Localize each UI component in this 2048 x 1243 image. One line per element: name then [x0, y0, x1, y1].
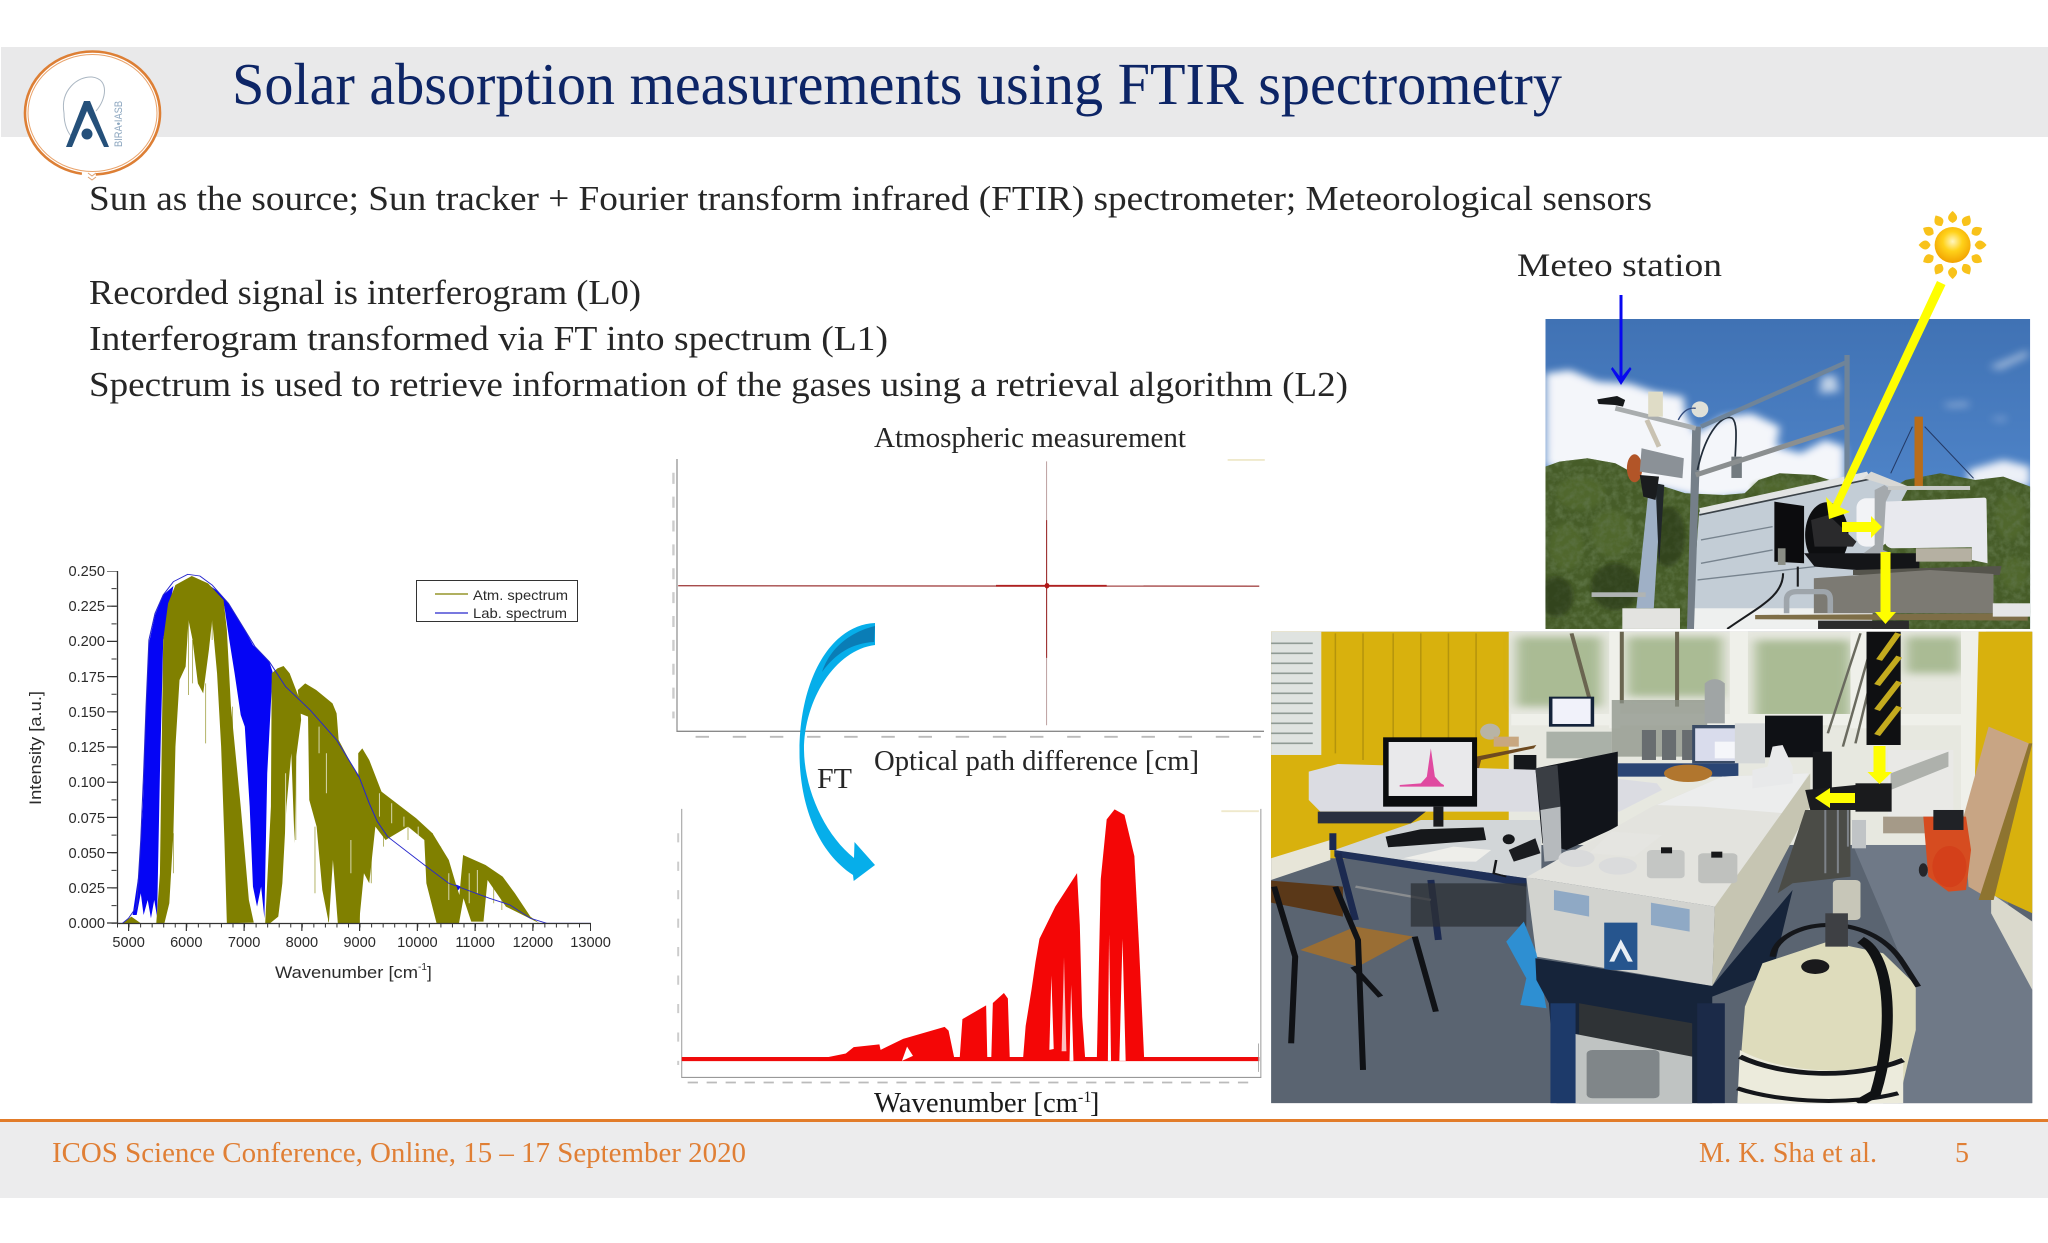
x axis tick labels: 13000: [570, 935, 611, 951]
cable cluster: [1778, 810, 1850, 893]
logo: BIRA-IASB: [24, 51, 160, 180]
legend: Lab. spectrum: [473, 605, 567, 621]
building: [1690, 475, 1909, 629]
spectral lines: [173, 620, 502, 922]
main spectrometer: [1527, 776, 1759, 906]
intro text block: [89, 179, 1652, 404]
left instrument: [1309, 764, 1662, 812]
header band: [1, 47, 2048, 137]
arrow: Fourier transform: [799, 623, 875, 881]
x axis tick labels: [112, 935, 611, 951]
x axis tick labels: 9000: [343, 935, 376, 951]
y axis tick labels: 0.025: [68, 881, 105, 897]
x axis title: -1: [418, 962, 427, 973]
y axis tick labels: 0.075: [68, 811, 105, 827]
chart label: optical path difference: Optical path difference [cm]: [874, 746, 1199, 777]
monitor: [1383, 737, 1477, 807]
black and yellow pole: [1867, 632, 1901, 745]
arrow: lab beam left: [1815, 788, 1855, 808]
x axis tick labels: 6000: [170, 935, 203, 951]
footer: author: M. K. Sha et al.: [1699, 1138, 1877, 1169]
y axis tick labels: 0.050: [68, 846, 105, 862]
chart label: wavenumber: Wavenumber [cm: [874, 1088, 1078, 1119]
tracker: [1774, 502, 1804, 563]
footer: page number: 5: [1955, 1138, 1969, 1169]
background desk items: [1549, 697, 1594, 727]
y axis tick labels: 0.175: [68, 670, 105, 686]
lab spectrum line: [117, 574, 590, 923]
mast: [1915, 417, 1923, 487]
intro text block: Sun as the source; Sun tracker + Fourier transform infrared (FTIR) spectrometer; Meteorological sensors: [89, 179, 1652, 218]
chart label: wavenumber: ]: [1090, 1088, 1099, 1119]
chart: solar spectrum in wavenumber: [678, 809, 1261, 1082]
y axis tick labels: [68, 564, 105, 932]
x axis tick labels: 12000: [513, 935, 553, 951]
blue lab spectrum absorption areas: [133, 583, 461, 918]
yellow wall: [1271, 632, 1512, 858]
y axis tick labels: 0.000: [68, 916, 105, 932]
x axis title: ]: [427, 963, 432, 982]
back windows: [1509, 632, 1986, 845]
y axis tick labels: 0.225: [68, 599, 105, 615]
desk: [1333, 820, 1541, 878]
lower bench: [1535, 890, 1793, 1103]
legend: Atm. spectrum: [473, 587, 568, 603]
arrow: blue pointer to meteo station: [1611, 295, 1632, 385]
y axis tick labels: 0.125: [68, 740, 105, 756]
intro text block: Recorded signal is interferogram (L0): [89, 273, 641, 312]
blue bag: [1506, 922, 1546, 1008]
white sampler: [1752, 745, 1792, 776]
footer band: [0, 1119, 2048, 1198]
legend: [416, 580, 578, 622]
chart: interferogram: [673, 459, 1265, 737]
axes and ticks: [112, 571, 591, 927]
intro text block: Spectrum is used to retrieve information of the gases using a retrieval algorithm (L2): [89, 365, 1348, 404]
y axis tick labels: 0.100: [68, 775, 105, 791]
label: FT: FT: [817, 764, 852, 795]
y axis tick labels: 0.150: [68, 705, 105, 721]
title: Solar absorption measurements using FTIR spectrometry: [232, 51, 1562, 117]
wood boards: [1964, 727, 2029, 900]
label: meteo station: Meteo station: [1517, 248, 1722, 284]
chart label: wavenumber: -1: [1078, 1089, 1091, 1106]
arrow: lab beam down: [1868, 746, 1892, 784]
x axis tick labels: 5000: [112, 935, 145, 951]
x axis tick labels: 8000: [286, 935, 318, 951]
logo: BIRA-IASB: BIRA•IASB: [113, 101, 125, 147]
olive atmospheric spectrum areas: [122, 576, 539, 923]
dewar: [1737, 942, 1916, 1103]
y axis tick labels: 0.200: [68, 634, 105, 650]
photo: rooftop sun tracker and meteo station: [1538, 319, 2030, 629]
chart: atmospheric vs lab spectrum: [26, 564, 611, 982]
chair: [1271, 881, 1343, 917]
x axis title: Wavenumber [cm: [275, 963, 418, 982]
compressor: [1923, 817, 1971, 892]
icon: sun: [1919, 211, 1987, 279]
intro text block: Interferogram transformed via FT into spectrum (L1): [89, 319, 888, 358]
x axis tick labels: 11000: [455, 935, 495, 951]
louvre: [1271, 632, 1321, 755]
photo: laboratory with FTIR spectrometer: [1271, 632, 2032, 1103]
railing: [1696, 355, 1848, 483]
y axis tick labels: 0.250: [68, 564, 105, 580]
arrow: tracker to telescope: [1842, 516, 1882, 538]
computer tower: [1535, 752, 1618, 850]
arrow: tracker down to laboratory: [1875, 552, 1896, 624]
pole and sensors: [1636, 496, 1658, 608]
arrow: sunlight to tracker: [1826, 281, 1946, 519]
absorption gaps: [902, 934, 1126, 1061]
footer: conference: ICOS Science Conference, Online, 15 – 17 September 2020: [52, 1138, 746, 1169]
x axis tick labels: 7000: [228, 935, 260, 951]
chart label: atmospheric measurement: Atmospheric measurement: [874, 423, 1186, 454]
x axis tick labels: 10000: [397, 935, 438, 951]
y axis title: Intensity [a.u.]: [26, 691, 45, 805]
optics rods: [1826, 633, 1866, 747]
